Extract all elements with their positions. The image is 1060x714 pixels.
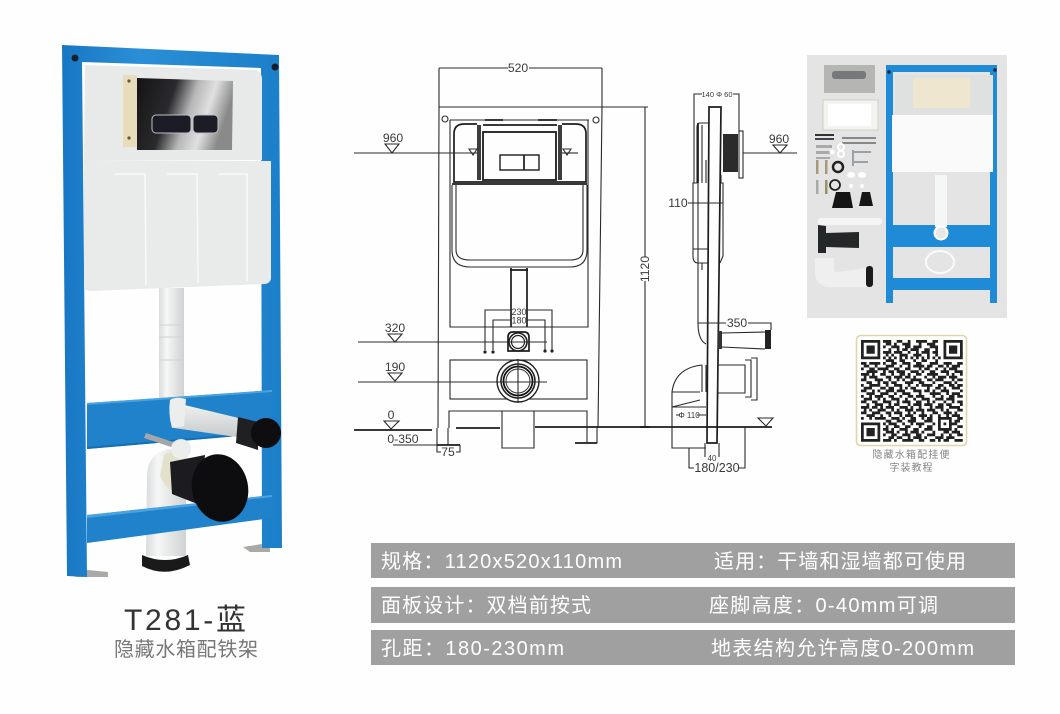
QR code <box>856 336 966 446</box>
top dimension 140 and diameter 60: 140 Φ 60 <box>701 90 733 99</box>
level 960 side <box>743 132 797 153</box>
level 190 with waste opening: 190 <box>385 360 405 374</box>
width dimension 520: 520 <box>508 61 528 75</box>
white pipe column <box>159 288 184 400</box>
QR caption: 字装教程 <box>890 461 932 474</box>
blue steel frame <box>62 45 282 577</box>
bottom dimensions 40 and 180/230: 180/230 <box>694 461 740 475</box>
spec bar 3 <box>371 630 1015 665</box>
QR caption <box>872 448 950 474</box>
side elevation technical drawing <box>640 90 797 475</box>
level 960 <box>354 131 478 153</box>
spec bar 1: 规格：1120x520x110mm <box>381 550 622 573</box>
bottom dimensions 40 and 180/230: 40 <box>708 454 717 463</box>
kit parts <box>815 65 882 287</box>
floor level, feet and lower frame: 75 <box>441 445 455 459</box>
spec bar 1: 适用：干墙和湿墙都可使用 <box>714 550 966 573</box>
bottom dimensions 40 and 180/230 <box>689 427 745 475</box>
spec bar 3: 地表结构允许高度0-200mm <box>711 637 974 660</box>
mini blue frame <box>886 65 997 303</box>
kit contents photo panel <box>807 55 1007 318</box>
lower cistern tank <box>84 161 271 291</box>
upper cistern with flush plate <box>84 65 262 161</box>
level 320 with outlet: 320 <box>385 321 405 335</box>
flush plate side view <box>723 131 743 178</box>
depth 350 with water inlet: 350 <box>727 316 747 330</box>
spec bar 1 <box>371 543 1015 578</box>
level 960: 960 <box>383 131 403 145</box>
waste outlet side <box>718 358 757 400</box>
subtitle: 隐藏水箱配铁架 <box>114 638 258 661</box>
waste pipes and black connectors <box>144 398 281 527</box>
outer frame <box>438 107 648 428</box>
floor level, feet and lower frame: 0 <box>388 408 395 422</box>
spec bar 3: 孔距：180-230mm <box>381 637 564 660</box>
elbow and floor: Φ 110 <box>678 411 700 420</box>
depth 350 with water inlet <box>698 316 771 349</box>
QR caption: 隐藏水箱配挂便 <box>872 448 950 461</box>
width dimension 520 <box>439 61 602 107</box>
level 320 with outlet <box>358 321 547 351</box>
title: T281-蓝 <box>124 604 246 637</box>
spec bar 2: 座脚高度：0-40mm可调 <box>709 594 938 617</box>
depth 110 <box>668 196 723 210</box>
product photo: blue frame with concealed cistern <box>62 45 282 577</box>
level 960 side: 960 <box>769 132 789 146</box>
spec bar 2: 面板设计：双档前按式 <box>381 594 591 617</box>
hole spacing 230 and 180: 230 <box>511 307 527 317</box>
side cistern and pipe <box>693 123 723 344</box>
floor level, feet and lower frame: 0-350 <box>387 432 419 446</box>
inner frame and cistern <box>442 116 599 327</box>
front elevation technical drawing <box>354 61 652 459</box>
hole spacing 230 and 180: 180 <box>511 316 527 326</box>
spec bar 2 <box>371 587 1015 623</box>
level 190 with waste opening <box>358 359 587 403</box>
top dimension 140 and diameter 60 <box>694 90 739 183</box>
mounting column <box>707 107 721 443</box>
height dimension 1120: 1120 <box>638 256 652 282</box>
elbow and floor <box>640 365 773 448</box>
white elbow behind the crossbar <box>142 449 190 572</box>
floor level, feet and lower frame <box>354 408 650 459</box>
hole spacing 230 and 180 <box>483 307 554 354</box>
depth 110: 110 <box>668 196 688 210</box>
